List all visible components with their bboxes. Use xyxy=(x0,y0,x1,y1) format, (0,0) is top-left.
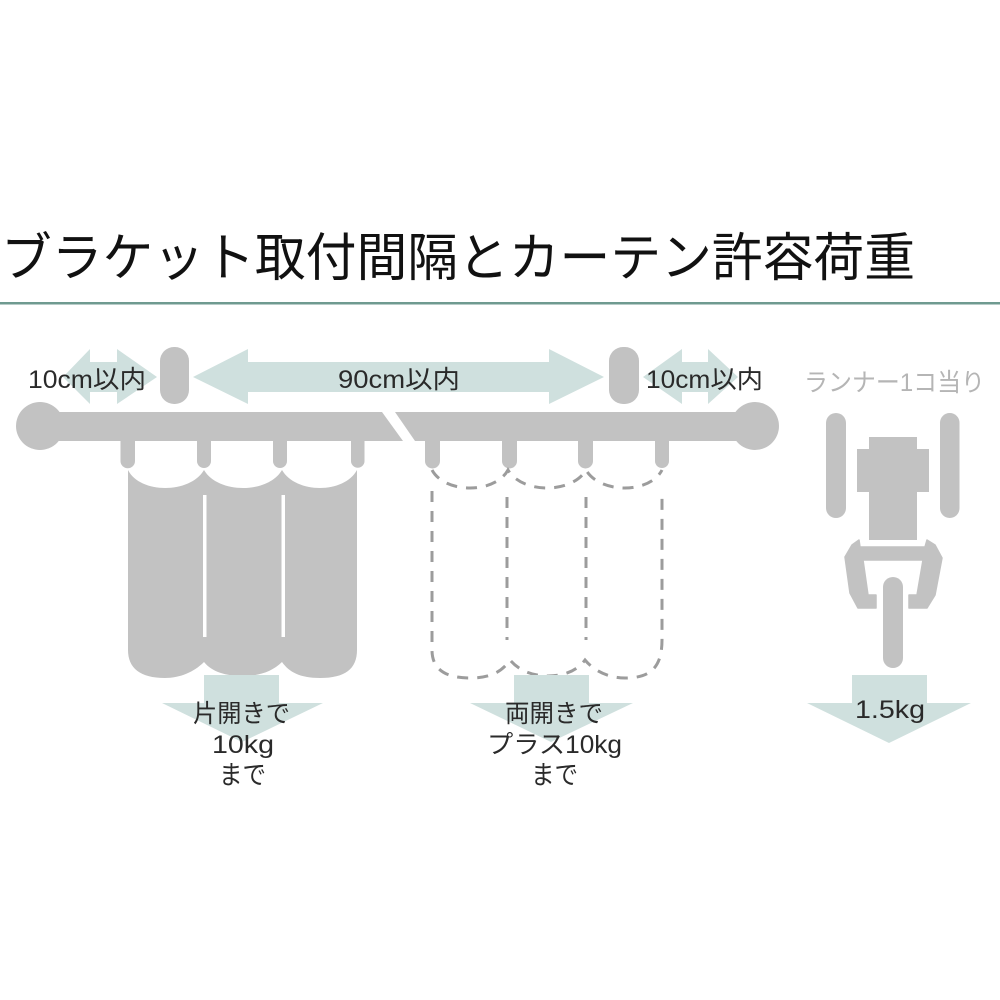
panel: single runner xyxy=(804,369,985,743)
label: plus 10kg: プラス10kg xyxy=(487,731,622,759)
label: 90cm: 90cm以内 xyxy=(338,366,460,394)
label: one-way opening: 片開きで xyxy=(193,700,290,728)
bracket: right xyxy=(609,347,639,404)
label: up to: まで xyxy=(531,760,578,790)
runner icon xyxy=(826,413,960,668)
diagram: curtain rail and brackets xyxy=(16,347,779,469)
spacing arrow: left 10cm xyxy=(63,349,157,404)
runner load arrow xyxy=(807,675,971,743)
label: 10kg: 10kg xyxy=(212,731,274,759)
curtain: solid one-way panels xyxy=(128,470,357,678)
load arrow: two-way xyxy=(470,675,633,790)
load arrow: one-way xyxy=(162,675,323,790)
title: ブラケット取付間隔とカーテン許容荷重 xyxy=(1,230,915,288)
runner heading: ランナー1コ当り xyxy=(804,369,985,397)
label: left 10cm: 10cm以内 xyxy=(28,366,146,394)
arrow shape xyxy=(162,675,323,742)
label: two-way opening: 両開きで xyxy=(505,700,603,728)
spacing arrow: 90cm xyxy=(193,349,604,404)
arrow shape xyxy=(470,675,633,742)
runner load label: 1.5kg xyxy=(855,696,925,724)
label: up to: まで xyxy=(219,760,266,790)
label: right 10cm: 10cm以内 xyxy=(646,366,763,394)
bracket: left xyxy=(160,347,189,404)
rail: right section with finial xyxy=(395,402,779,469)
panel separators xyxy=(203,495,285,637)
curtain: dashed two-way panels xyxy=(432,470,662,678)
curtain body xyxy=(128,470,357,678)
spacing arrow: right 10cm xyxy=(643,349,738,404)
rail: left section with finial xyxy=(16,402,403,468)
